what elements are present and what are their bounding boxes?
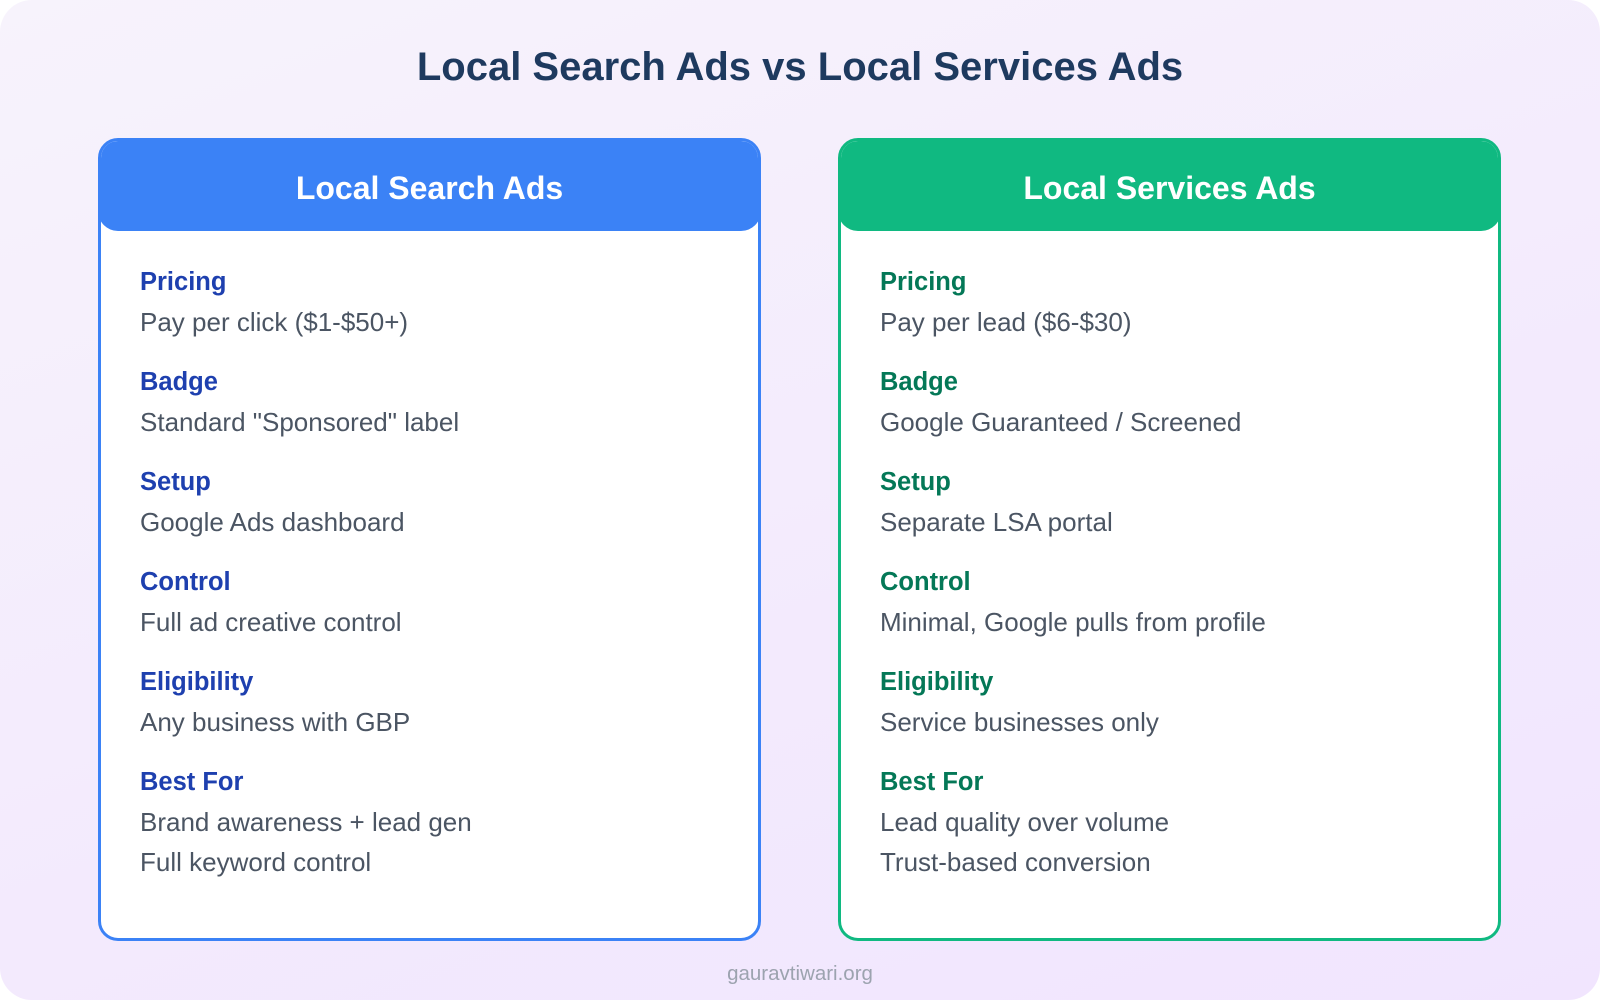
item: badge: Standard "Sponsored" label: [140, 407, 459, 437]
item: best for: Best For: [880, 768, 983, 796]
item: eligibility: Eligibility: [880, 668, 993, 696]
item: setup: Setup: [140, 468, 211, 496]
item: pricing: Pricing: [140, 268, 226, 296]
item: badge: Badge: [880, 368, 958, 396]
item: pricing: [880, 268, 1131, 337]
item: badge: [880, 368, 1241, 437]
item: control: Control: [140, 568, 231, 596]
item: control: Minimal, Google pulls from profile: [880, 607, 1266, 637]
item: control: Control: [880, 568, 971, 596]
item: control: [880, 568, 1266, 637]
item: best for: Trust-based conversion: [880, 847, 1151, 877]
item: eligibility: [880, 668, 1159, 737]
item: badge: Badge: [140, 368, 218, 396]
item: setup: [880, 468, 1113, 537]
item: best for: Full keyword control: [140, 847, 371, 877]
item: setup: Google Ads dashboard: [140, 507, 405, 537]
item: best for: Brand awareness + lead gen: [140, 807, 472, 837]
item: pricing: Pay per click ($1-$50+): [140, 307, 408, 337]
item: best for: [880, 768, 1169, 877]
header: local search ads: [98, 138, 761, 231]
item: control: Full ad creative control: [140, 607, 402, 637]
title: Local Search Ads vs Local Services Ads: [417, 45, 1183, 89]
item: setup: Separate LSA portal: [880, 507, 1113, 537]
item: eligibility: Any business with GBP: [140, 707, 410, 737]
item: setup: Setup: [880, 468, 951, 496]
item: badge: Google Guaranteed / Screened: [880, 407, 1241, 437]
header: local services ads: [838, 138, 1501, 231]
item: pricing: [140, 268, 408, 337]
item: setup: [140, 468, 405, 537]
item: badge: [140, 368, 459, 437]
footer: gauravtiwari.org: [727, 962, 873, 985]
item: control: [140, 568, 402, 637]
item: pricing: Pricing: [880, 268, 966, 296]
item: pricing: Pay per lead ($6-$30): [880, 307, 1131, 337]
item: eligibility: Service businesses only: [880, 707, 1159, 737]
header: local services ads: Local Services Ads: [1023, 170, 1316, 206]
item: best for: [140, 768, 472, 877]
panel: local search ads: [98, 138, 761, 941]
item: best for: Lead quality over volume: [880, 807, 1169, 837]
panel: local services ads: [838, 138, 1501, 941]
header: local search ads: Local Search Ads: [296, 170, 563, 206]
item: eligibility: [140, 668, 410, 737]
item: best for: Best For: [140, 768, 243, 796]
item: eligibility: Eligibility: [140, 668, 253, 696]
